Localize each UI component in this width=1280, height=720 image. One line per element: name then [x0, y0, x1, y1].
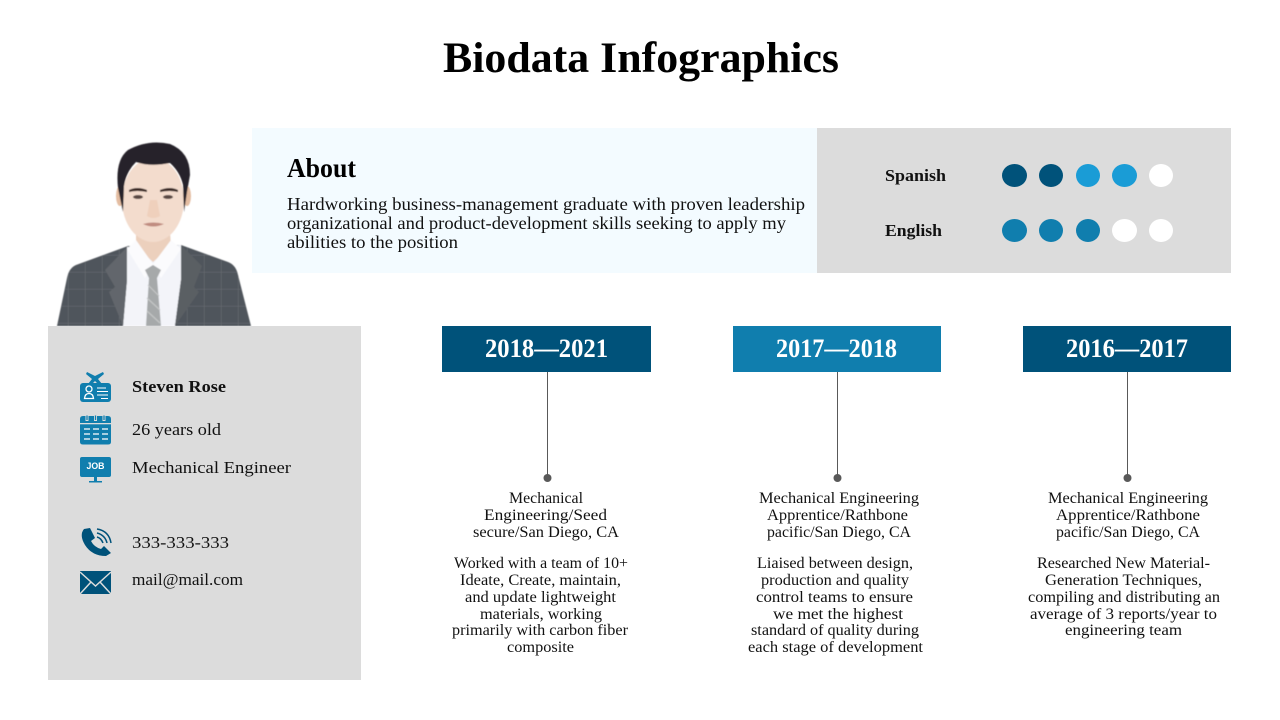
role: Apprentice/Rathbone	[1056, 507, 1200, 524]
description: primarily with carbon fiber	[452, 622, 629, 639]
photo: man in grey suit	[57, 142, 251, 326]
role: Mechanical Engineering	[1048, 490, 1208, 507]
description: Generation Techniques,	[1045, 572, 1202, 589]
language: Spanish	[885, 164, 1173, 187]
icon: id badge	[80, 372, 111, 402]
phone number: 333-333-333	[132, 533, 229, 552]
icon: job monitor: JOB	[86, 461, 105, 471]
timeline column: 2018-2021	[442, 326, 651, 656]
description: average of 3 reports/year to	[1030, 606, 1217, 623]
role: secure/San Diego, CA	[473, 524, 619, 541]
panel: about	[252, 128, 817, 273]
role: pacific/San Diego, CA	[767, 524, 911, 541]
year header	[442, 326, 651, 372]
icon: envelope	[80, 571, 111, 594]
icon: phone	[82, 528, 111, 556]
role: Apprentice/Rathbone	[767, 507, 908, 524]
about text	[287, 194, 805, 252]
description: composite	[507, 639, 574, 656]
panel: personal details	[48, 326, 361, 680]
role: Mechanical Engineering	[759, 490, 919, 507]
language: English	[885, 219, 1173, 242]
about text: abilities to the position	[287, 232, 458, 252]
timeline column: 2017-2018	[733, 326, 941, 656]
year header	[1023, 326, 1231, 372]
description: each stage of development	[748, 639, 924, 656]
about text: organizational and product-development skills seeking to apply my	[287, 213, 786, 233]
description: we met the highest	[773, 606, 904, 623]
age: 26 years old	[132, 420, 222, 439]
email: mail@mail.com	[132, 570, 243, 589]
about heading: About	[287, 153, 356, 183]
timeline column: 2016-2017	[1023, 326, 1231, 639]
description: compiling and distributing an	[1028, 589, 1220, 606]
description: Worked with a team of 10+	[454, 555, 628, 572]
language: Spanish: Spanish	[885, 166, 947, 185]
role: Mechanical	[509, 490, 584, 507]
role: pacific/San Diego, CA	[1056, 524, 1200, 541]
year header	[733, 326, 941, 372]
job title: Mechanical Engineer	[132, 458, 291, 477]
language: English: English	[885, 221, 943, 240]
description: Researched New Material-	[1037, 555, 1210, 572]
timeline column: 2017-2018: 2017—2018	[776, 334, 897, 363]
description: production and quality	[761, 572, 909, 589]
title: Biodata Infographics	[443, 35, 839, 82]
timeline column: 2016-2017: 2016—2017	[1066, 334, 1188, 363]
description: engineering team	[1065, 622, 1183, 639]
description: control teams to ensure	[756, 589, 913, 606]
role: Engineering/Seed	[484, 507, 607, 524]
connector	[1126, 372, 1128, 478]
icon: job monitor	[80, 457, 111, 482]
panel: languages	[817, 128, 1231, 273]
description	[452, 555, 629, 656]
description: standard of quality during	[751, 622, 919, 639]
description	[1028, 555, 1220, 639]
about text: Hardworking business-management graduate with proven leadership	[287, 194, 805, 214]
description: Ideate, Create, maintain,	[460, 572, 621, 589]
description	[748, 555, 924, 656]
role	[759, 490, 919, 541]
connector	[836, 372, 838, 478]
description: and update lightweight	[465, 589, 617, 606]
connector	[546, 372, 548, 478]
description: materials, working	[480, 606, 602, 623]
timeline column: 2018-2021: 2018—2021	[485, 334, 608, 363]
role	[473, 490, 619, 541]
description: Liaised between design,	[757, 555, 913, 572]
name: Steven Rose	[132, 377, 226, 396]
role	[1048, 490, 1208, 541]
icon: calendar	[80, 415, 111, 444]
